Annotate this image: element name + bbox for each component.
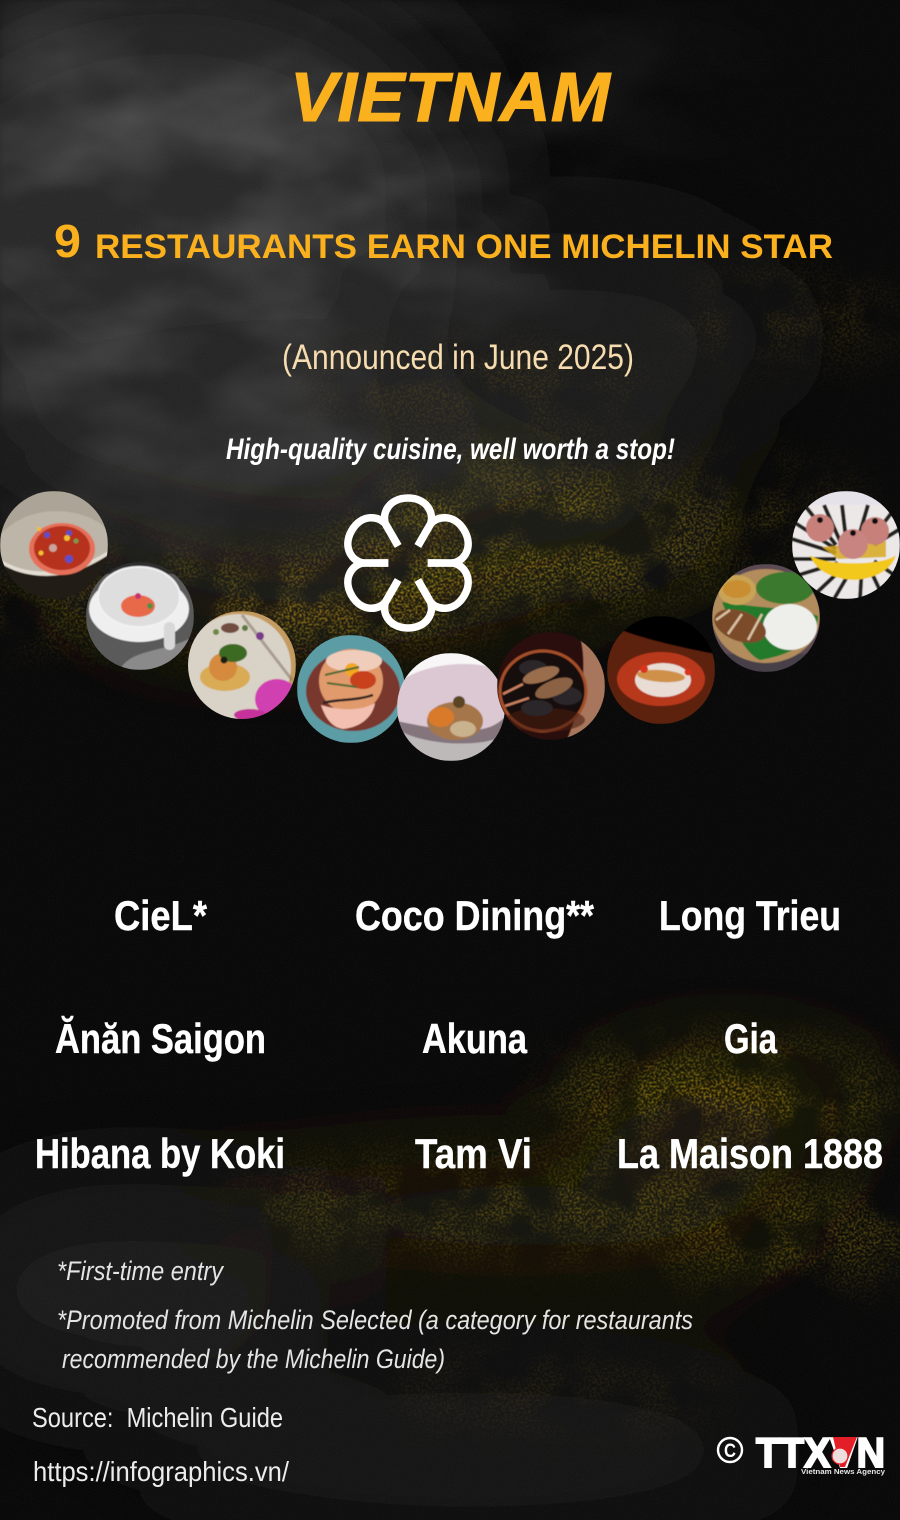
restaurant: Hibana by Koki: Hibana by Koki — [35, 1130, 285, 1177]
icon: copyright — [718, 1438, 742, 1462]
dish photo 2 — [86, 562, 194, 670]
footnotes: *Promoted from Michelin Selected (a category for restaurants — [57, 1305, 693, 1335]
dish photo 7 — [607, 616, 715, 724]
dish photo 5 — [397, 653, 505, 761]
restaurant: Tam Vi: Tam Vi — [415, 1130, 532, 1177]
restaurant: Akuna: Akuna — [422, 1015, 528, 1062]
subtitle: 9 — [54, 215, 81, 267]
dish photo 6 — [497, 632, 605, 740]
website: https://infographics.vn/ — [33, 1456, 289, 1487]
title: VIETNAM — [290, 58, 612, 136]
footnotes — [57, 1256, 693, 1374]
dish photo 1 — [0, 491, 108, 599]
logo: TTXVN: Vietnam News Agency — [801, 1467, 886, 1476]
restaurant list — [35, 892, 883, 1177]
announcement date: (Announced in June 2025) — [282, 338, 634, 377]
restaurant: Long Trieu: Long Trieu — [659, 892, 841, 939]
footnotes: *First-time entry — [57, 1256, 224, 1286]
dish photo 4 — [297, 635, 405, 743]
tagline: High-quality cuisine, well worth a stop! — [226, 433, 675, 466]
restaurant: Anan Saigon: Ănăn Saigon — [55, 1015, 266, 1062]
icon: red V and globe — [832, 1437, 857, 1467]
subtitle: RESTAURANTS EARN ONE MICHELIN STAR — [95, 228, 833, 266]
dish photo 8 — [709, 564, 820, 672]
source: Source: Michelin Guide — [32, 1402, 283, 1433]
restaurant: Coco Dining: Coco Dining** — [355, 892, 595, 939]
dish photo 9 — [792, 491, 900, 599]
icon: copyright: C — [724, 1441, 736, 1462]
dish photo 3 — [185, 611, 299, 721]
restaurant: Gia: Gia — [724, 1015, 777, 1062]
icon: Michelin star — [340, 498, 476, 628]
subtitle — [54, 215, 833, 267]
logo: TTXVN: TTXVN — [756, 1429, 885, 1476]
footnotes: recommended by the Michelin Guide) — [62, 1344, 445, 1374]
restaurant: CieL: CieL* — [114, 892, 208, 939]
